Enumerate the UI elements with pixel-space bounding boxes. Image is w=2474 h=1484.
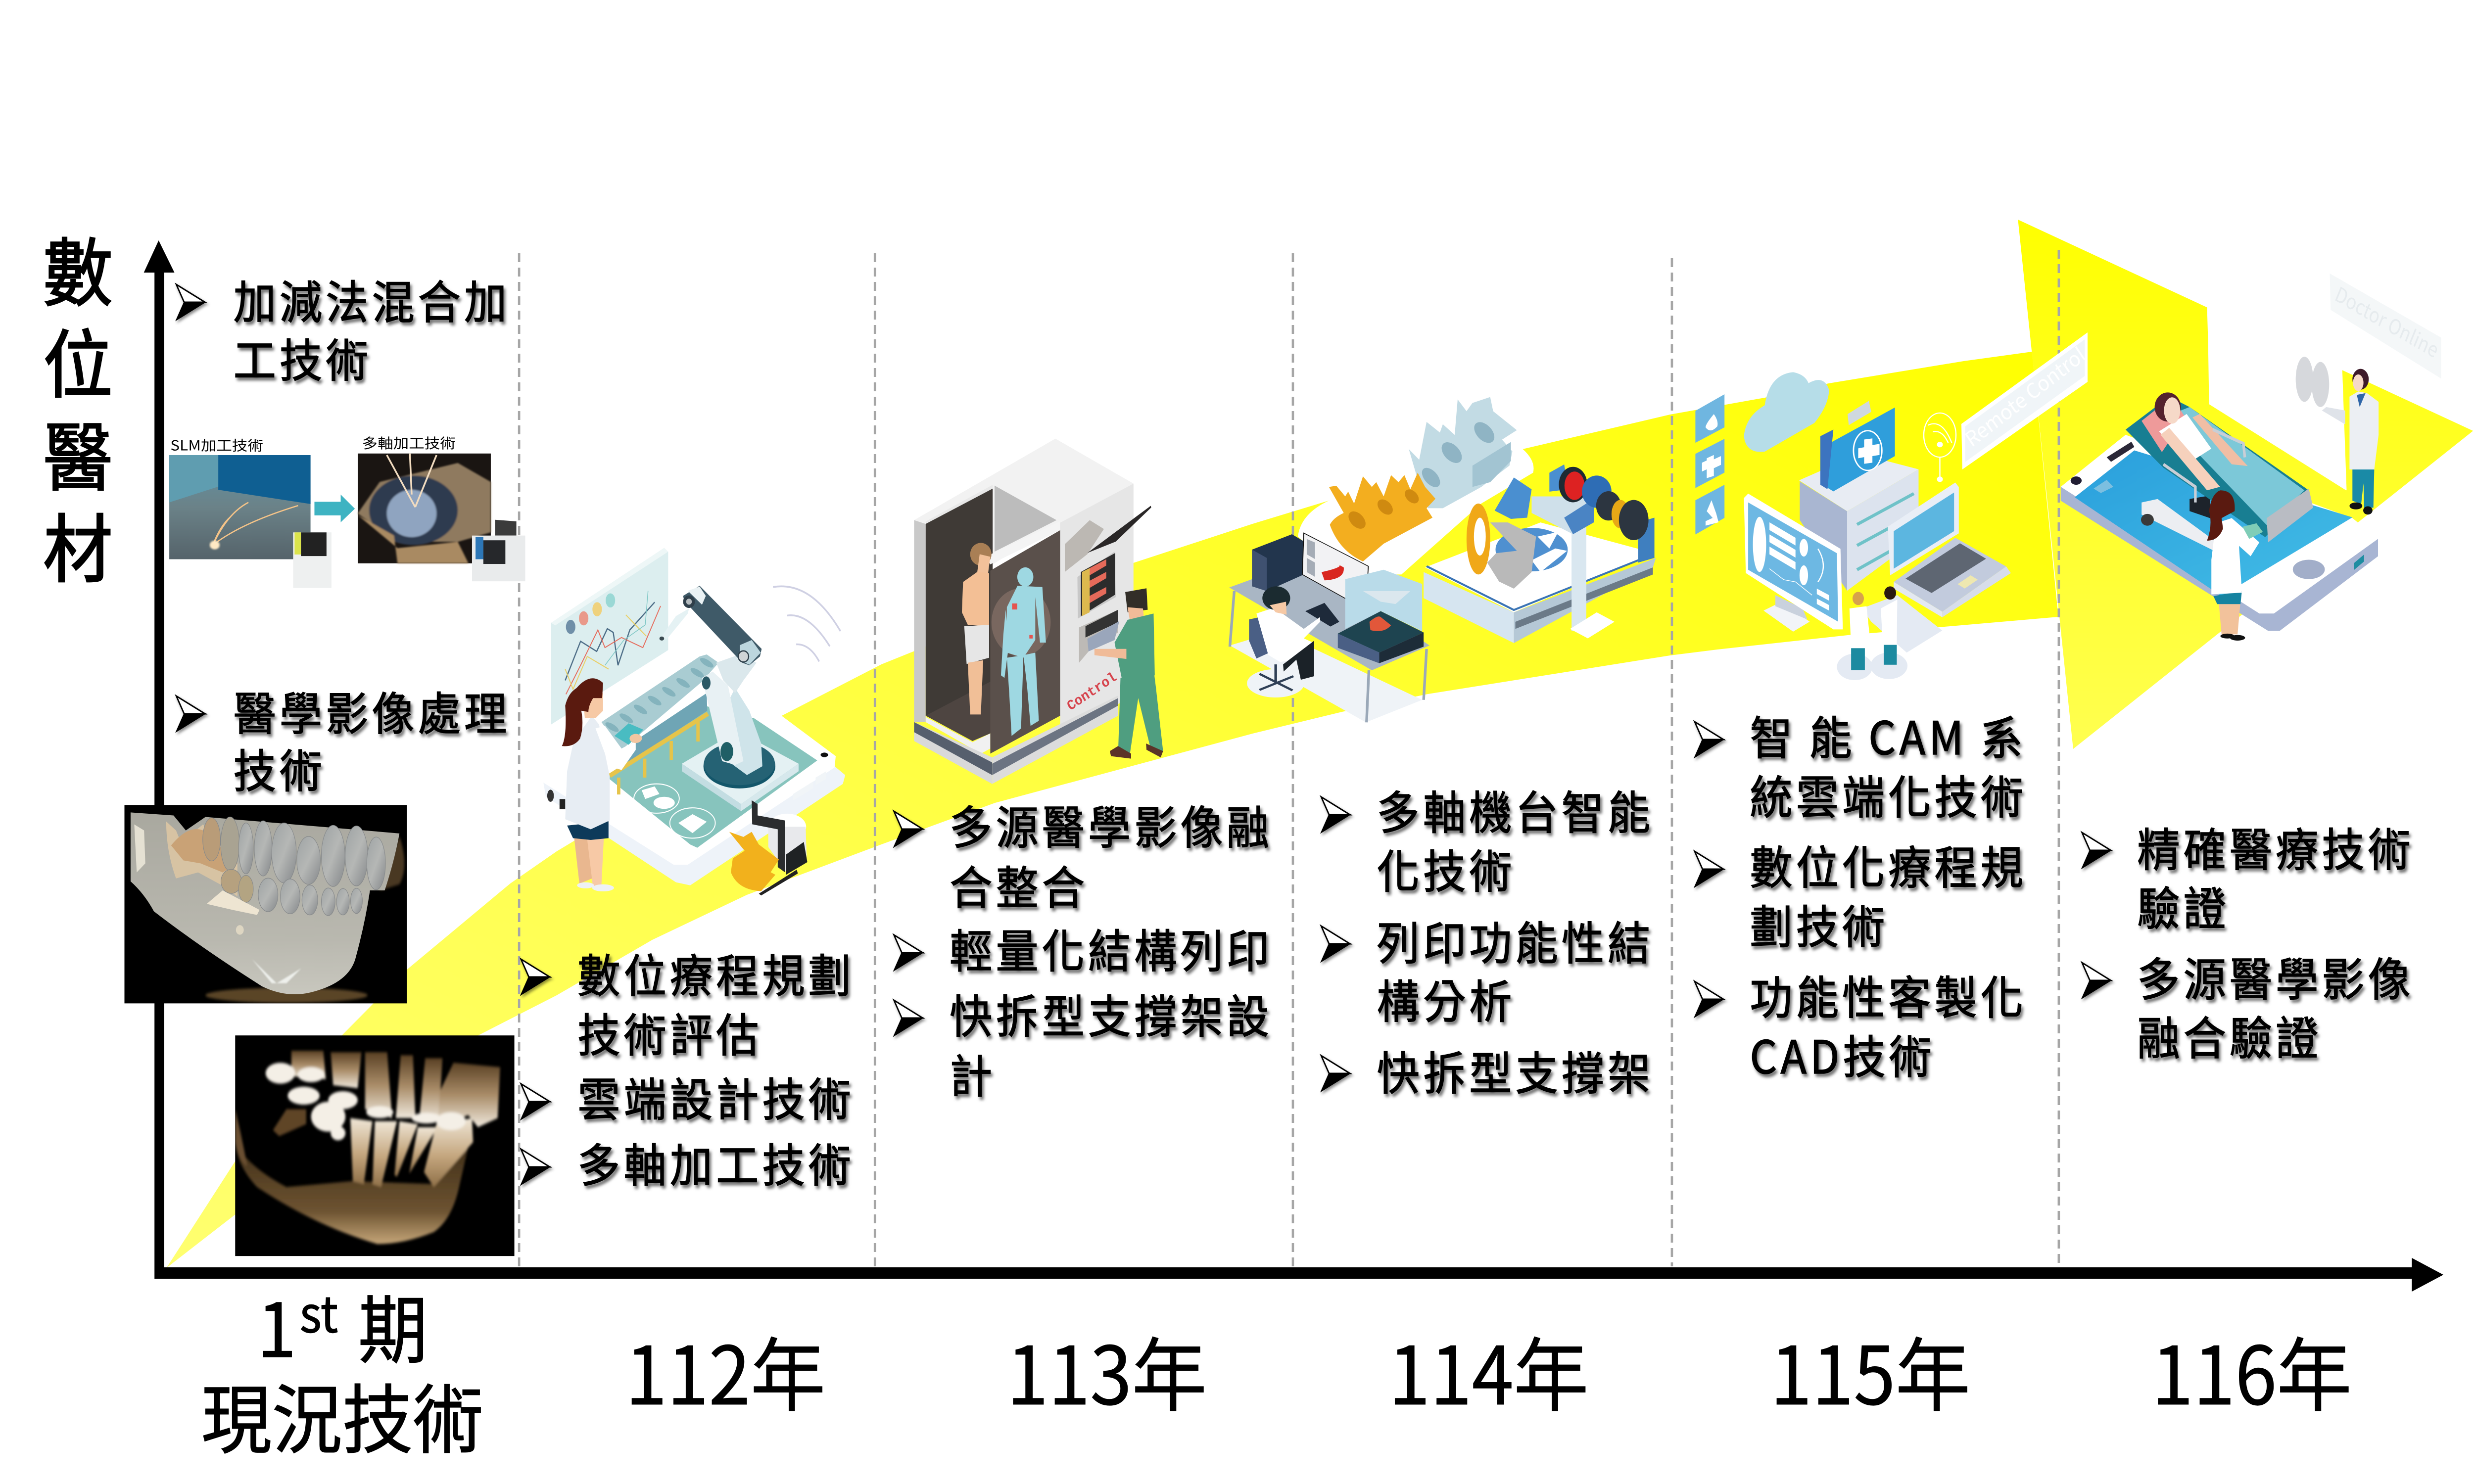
signal waves <box>773 586 841 661</box>
113 technology list: 合整合 <box>950 852 1088 918</box>
desktop monitor <box>1744 494 1843 632</box>
current technology: additive subtractive hybrid: 加減法混合加 <box>234 266 510 332</box>
illustration: 116 smart bed on phone <box>2061 274 2443 641</box>
phone device <box>2061 435 2378 631</box>
technician <box>1094 588 1163 759</box>
photo: 3D rendered jaw, translucent <box>235 1035 515 1256</box>
brain hologram <box>2296 357 2329 407</box>
113 technology list <box>894 791 1273 1106</box>
scientist with tablet <box>562 678 643 891</box>
period label: first phase current technology: 期 <box>342 1271 428 1378</box>
115 technology list: 智 能 CAM 系 <box>1750 702 2026 768</box>
chart panel <box>551 548 668 725</box>
vertical axis title: 材 <box>43 490 113 597</box>
hospital bed <box>2126 392 2313 555</box>
monitor with teeth model <box>1302 533 1368 627</box>
period label: first phase current technology <box>201 1271 483 1469</box>
116 technology list: 融合驗證 <box>2137 1002 2322 1068</box>
label: SLM: SLM加工技術 <box>170 434 263 455</box>
period label: first phase current technology: st <box>300 1275 338 1346</box>
113 technology list: 輕量化結構列印 <box>950 915 1273 981</box>
114 technology list: 列印功能性結 <box>1377 907 1654 973</box>
current technology: additive subtractive hybrid: 工技術 <box>234 325 372 390</box>
floor and desk <box>1229 560 1429 722</box>
machine: SLM printer <box>293 532 332 588</box>
current technology: additive subtractive hybrid <box>176 266 510 390</box>
114 technology list: 多軸機台智能 <box>1377 777 1654 842</box>
116 technology list <box>2082 814 2414 1068</box>
two doctors <box>1837 586 1907 680</box>
label: multi-axis: 多軸加工技術 <box>362 432 456 452</box>
nurse with tablet <box>2207 490 2263 641</box>
113 technology list: 快拆型支撐架設 <box>950 980 1273 1046</box>
illustration: 113 medical imaging booth <box>914 439 1163 784</box>
period label: first phase current technology: 現況技術 <box>201 1360 483 1469</box>
114 technology list <box>1321 777 1654 1103</box>
112 technology list: 數位療程規劃 <box>577 940 855 1006</box>
vertical axis title: 數 <box>43 214 113 321</box>
112 technology list: 技術評估 <box>577 999 762 1065</box>
dashed year dividers <box>519 250 2059 1266</box>
printed spine, blue <box>1409 397 1517 508</box>
doctor online sign: Doctor Online <box>2331 278 2443 364</box>
116 technology list: 驗證 <box>2137 873 2230 938</box>
cloud <box>1744 372 1829 452</box>
116 technology list: 多源醫學影像 <box>2137 943 2414 1009</box>
vertical axis title: 醫 <box>43 398 113 506</box>
115 technology list: 數位化療程規 <box>1750 832 2027 897</box>
year label 112: 112年 <box>625 1312 826 1428</box>
white backdrop panel <box>2207 306 2347 490</box>
wifi sensor <box>1924 413 1956 481</box>
114 technology list: 化技術 <box>1377 835 1515 901</box>
computer tower <box>1252 534 1304 591</box>
year label 116: 116年 <box>2151 1312 2352 1428</box>
photo: SLM laser <box>169 455 311 559</box>
vertical axis arrow <box>144 240 175 1279</box>
illustration: 112 robot arm on tablet <box>543 548 845 895</box>
photo: 3D rendered jaw, bone <box>124 805 407 1003</box>
vertical axis title <box>43 214 113 597</box>
year label 114: 114年 <box>1388 1312 1589 1428</box>
113 technology list: 多源醫學影像融 <box>950 791 1273 857</box>
3D printer <box>1424 464 1656 643</box>
115 technology list: 劃技術 <box>1750 891 1888 957</box>
machine: multi-axis mill <box>472 520 525 581</box>
115 technology list: 統雲端化技術 <box>1750 761 2027 827</box>
115 technology list <box>1695 702 2027 1087</box>
year label 113: 113年 <box>1007 1312 1207 1428</box>
current technology: medical image processing: 醫學影像處理 <box>234 678 510 743</box>
tablet screen <box>606 706 817 848</box>
112 technology list <box>521 940 855 1195</box>
112 technology list: 多軸加工技術 <box>577 1129 855 1195</box>
112 technology list: 雲端設計技術 <box>577 1064 855 1129</box>
current technology: medical image processing: 技術 <box>234 735 326 801</box>
engineer on chair <box>1249 586 1320 691</box>
white backdrop <box>1298 425 1534 574</box>
tablet body <box>543 652 845 885</box>
label on machine: Control <box>1065 670 1120 715</box>
skeleton scan <box>992 567 1050 736</box>
tablet on floor <box>1862 595 1942 652</box>
patient <box>962 543 992 714</box>
illustration: 114 design desk and 3D printer <box>1229 397 1656 722</box>
114 technology list: 構分析 <box>1377 966 1515 1031</box>
resin printer <box>1338 570 1424 663</box>
doctor <box>2322 369 2379 514</box>
growth arrow: yellow roadmap band <box>167 220 2473 1268</box>
horizontal axis arrow <box>158 1258 2443 1292</box>
current technology: medical image processing <box>176 678 510 801</box>
robot arm <box>660 586 799 811</box>
photo: multi-axis machining <box>358 454 491 563</box>
laptop <box>1888 483 2011 617</box>
vertical axis title: 位 <box>43 305 113 413</box>
114 technology list: 快拆型支撐架 <box>1377 1037 1654 1103</box>
printed spine, yellow <box>1329 473 1435 561</box>
116 technology list: 精確醫療技術 <box>2137 814 2414 880</box>
illustration: 115 cloud medical system <box>1695 372 2011 680</box>
115 technology list: 功能性客製化 <box>1750 962 2027 1027</box>
remote control banner: Remote Control <box>1958 339 2091 453</box>
data icons <box>1695 394 1724 534</box>
conveyor <box>601 654 718 794</box>
113 technology list: 計 <box>950 1040 996 1106</box>
year label 115: 115年 <box>1770 1312 1970 1428</box>
forklift carrying yellow implant <box>729 800 808 895</box>
process photos: SLM to multi-axis <box>169 432 525 588</box>
period label: first phase current technology: 1 <box>257 1271 296 1378</box>
booth cabinet <box>914 439 1134 784</box>
medical case and server <box>1799 401 1918 591</box>
115 technology list: CAD技術 <box>1750 1021 1935 1087</box>
control panels <box>1065 506 1151 663</box>
arrow: teal process arrow <box>314 495 355 522</box>
